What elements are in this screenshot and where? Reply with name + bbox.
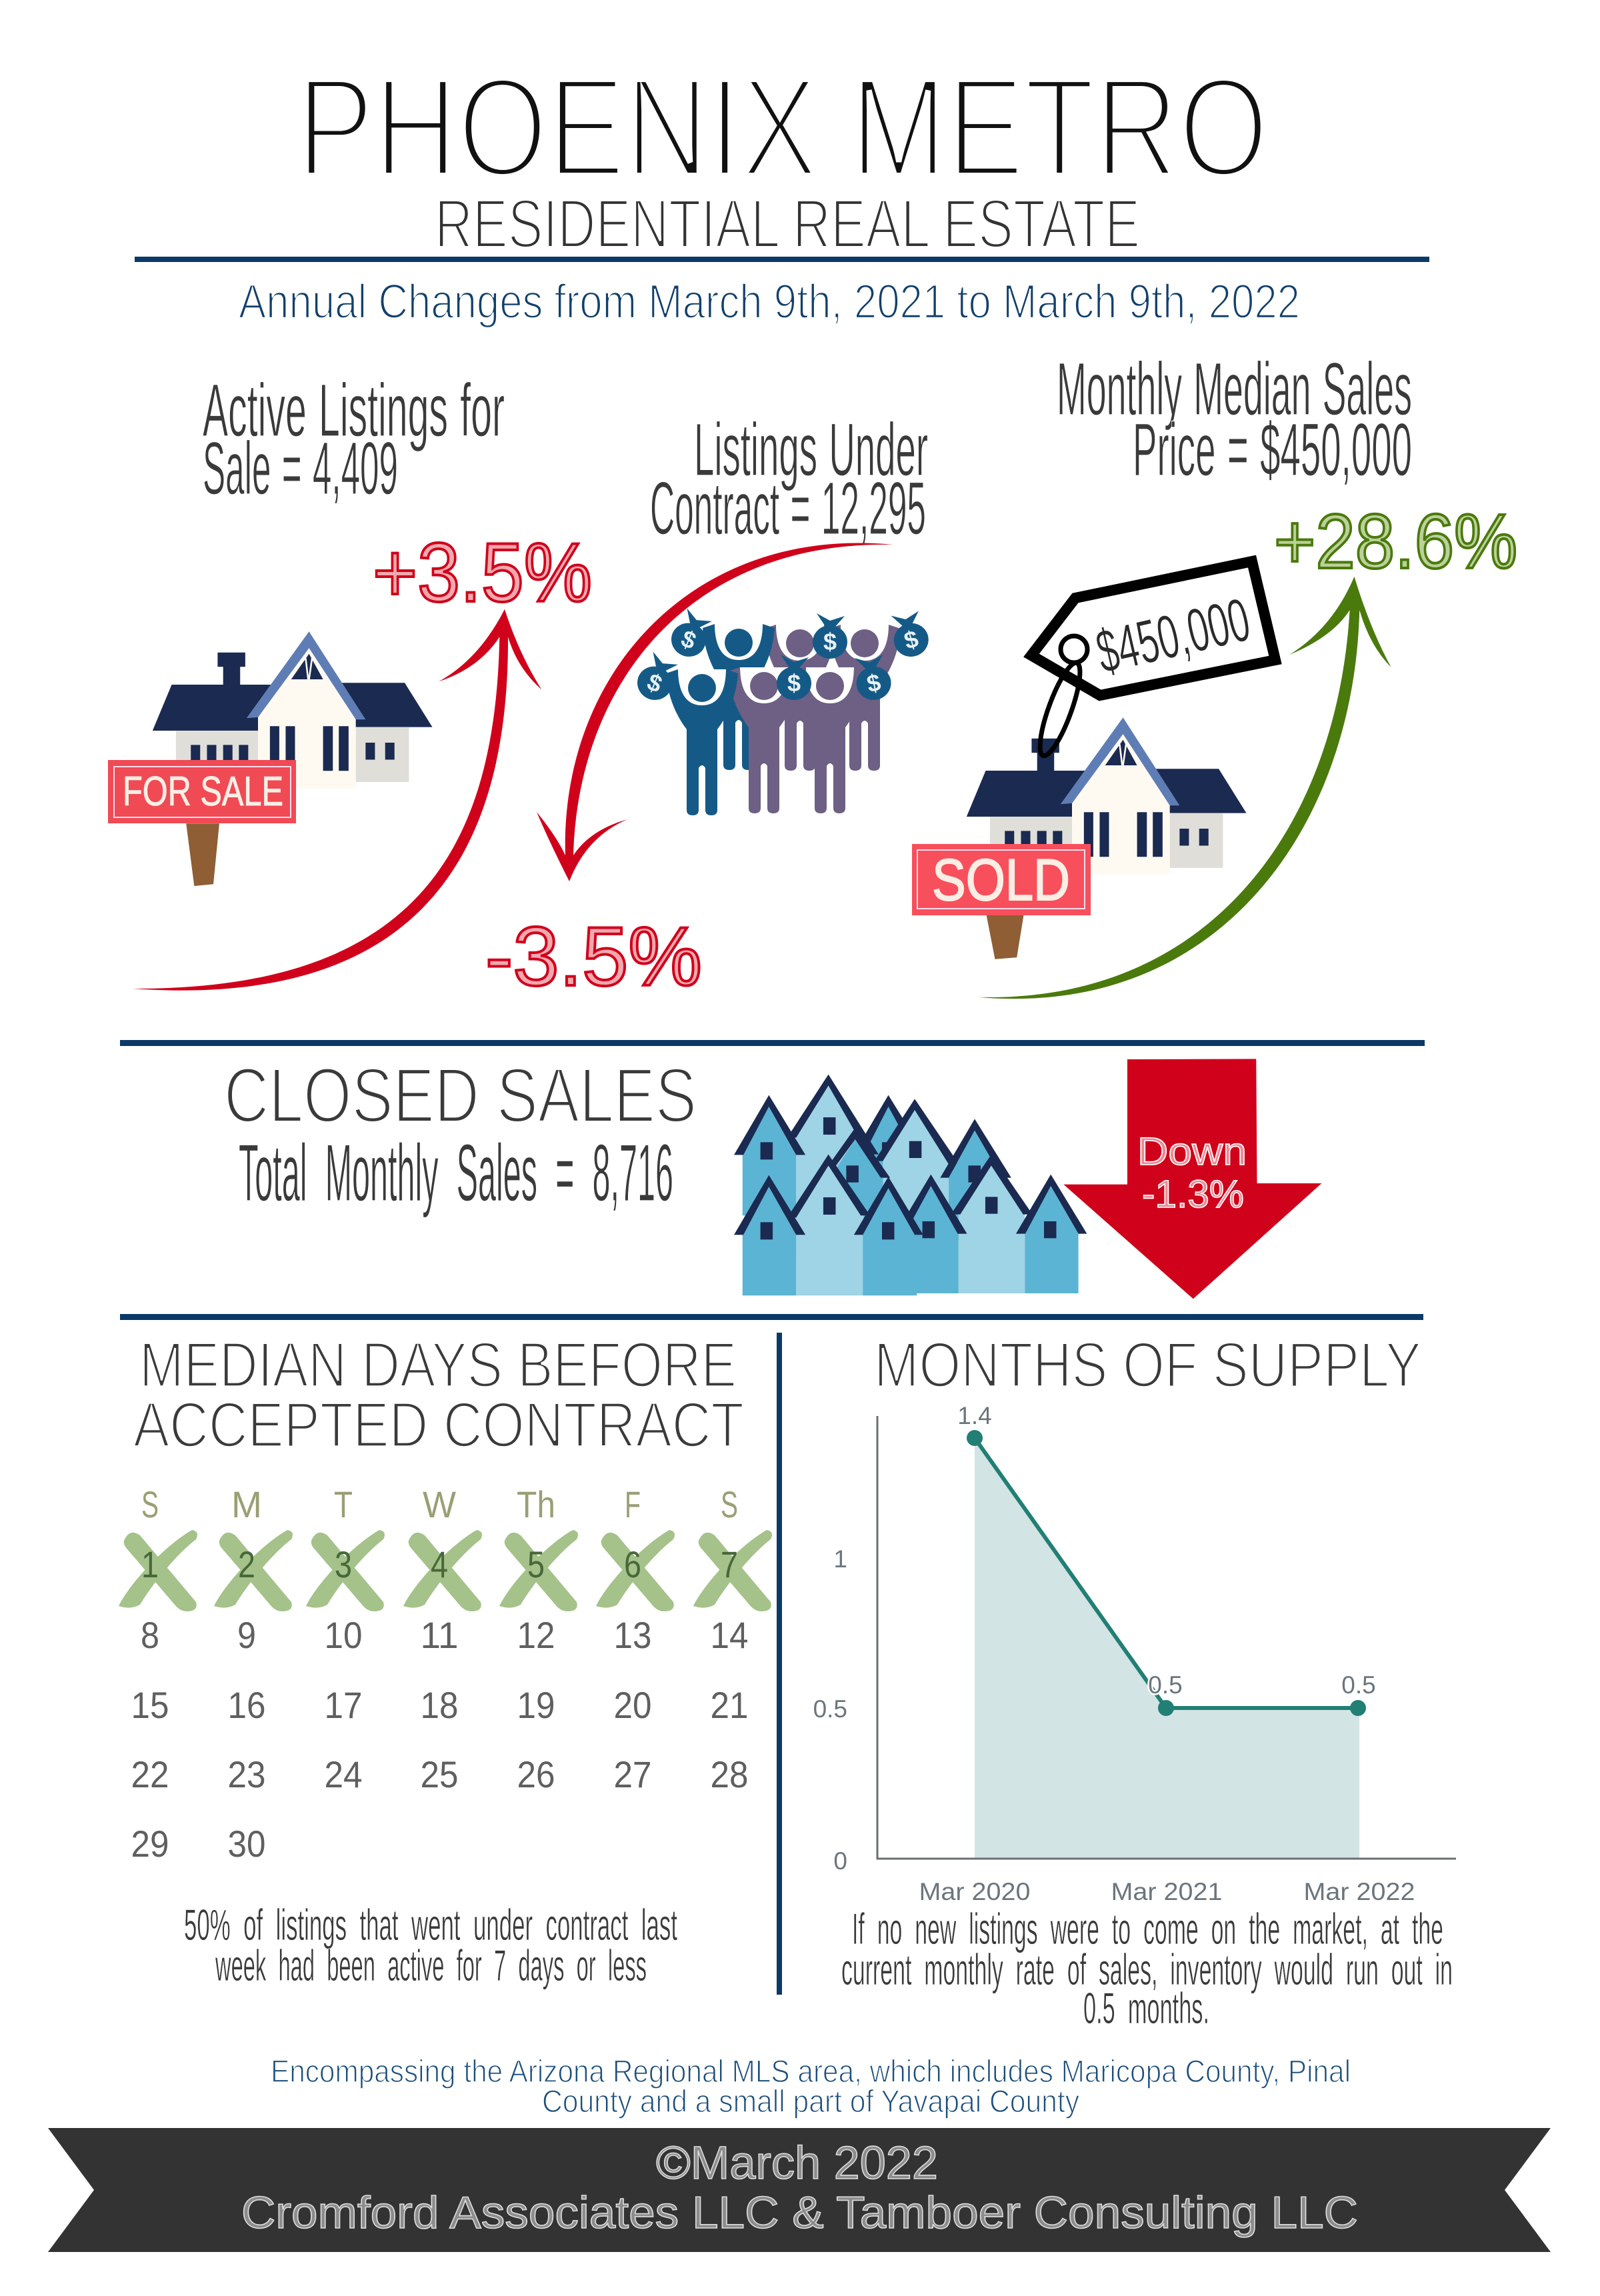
area line chart: 1 [833, 1545, 847, 1573]
calendar: 1 [141, 1543, 159, 1585]
calendar: 16 [228, 1684, 265, 1726]
calendar: 29 [131, 1823, 169, 1865]
icon: crowd with money bags: $ [787, 669, 801, 697]
panel: months of supply [813, 1329, 1456, 2033]
calendar: W [423, 1483, 456, 1525]
arrow: price up [979, 577, 1391, 999]
area line chart: Mar 2021 [1111, 1878, 1223, 1905]
median days heading: ACCEPTED CONTRACT [133, 1389, 744, 1461]
coverage note: County and a small part of Yavapai County [542, 2083, 1079, 2119]
supply caption [841, 1904, 1453, 2033]
calendar: 22 [131, 1753, 169, 1795]
sales change label: Down [1137, 1130, 1247, 1173]
calendar: 26 [517, 1753, 555, 1795]
calendar: S [141, 1483, 159, 1525]
median price label [1057, 347, 1412, 491]
area line chart: Mar 2020 [919, 1878, 1031, 1905]
panel: active listings [108, 369, 592, 991]
median days heading: MEDIAN DAYS BEFORE [139, 1329, 737, 1401]
icon: sold sign: SOLD [932, 847, 1070, 913]
sales change label: -1.3% [1142, 1173, 1244, 1216]
icon: price tag: $450,000 [1090, 585, 1256, 687]
calendar: 11 [420, 1614, 459, 1656]
date range heading: Annual Changes from March 9th, 2021 to March 9th, 2022 [239, 275, 1300, 329]
under contract change: -3.5% [485, 911, 702, 1003]
icon: sold sign [912, 844, 1091, 959]
sales change label [1137, 1130, 1247, 1216]
calendar: 30 [228, 1823, 265, 1865]
calendar: 15 [131, 1684, 169, 1726]
calendar: 2 [238, 1543, 255, 1585]
calendar: F [625, 1483, 641, 1525]
text: Contract = 12,295 [650, 467, 926, 550]
icon: crowd with money bags [632, 607, 932, 815]
text: Listings Under [694, 408, 928, 491]
closed sales heading: CLOSED SALES [224, 1052, 697, 1139]
icon: crowd with money bags: $ [901, 625, 921, 655]
months of supply heading: MONTHS OF SUPPLY [874, 1329, 1421, 1401]
calendar crossed-out days [119, 1530, 772, 1611]
subtitle: RESIDENTIAL REAL ESTATE [435, 185, 1140, 262]
area line chart: 0.5 [813, 1695, 847, 1723]
area line chart: 1.4 [957, 1402, 992, 1429]
calendar: M [231, 1483, 262, 1525]
icon: crowd with money bags: $ [864, 668, 883, 698]
active listings label [203, 369, 505, 510]
calendar: 27 [613, 1753, 652, 1795]
icon: crowd with money bags: $ [643, 668, 666, 698]
calendar: 14 [711, 1614, 748, 1656]
panel: median days before accepted contract [119, 1329, 772, 1990]
icon: crowd with money bags: $ [823, 628, 837, 655]
calendar: 24 [324, 1753, 363, 1795]
calendar caption: 50% of listings that went under contract last [184, 1900, 677, 1949]
calendar caption: week had been active for 7 days or less [215, 1941, 647, 1990]
calendar: 28 [711, 1753, 748, 1795]
median days heading [133, 1329, 744, 1461]
calendar: 4 [431, 1543, 448, 1585]
calendar caption [184, 1900, 677, 1990]
panel: listings under contract [485, 408, 932, 1003]
copyright text [241, 2137, 1358, 2238]
coverage note: Encompassing the Arizona Regional MLS area, which includes Maricopa County, Pinal [271, 2053, 1351, 2089]
panel: median sales price [912, 347, 1517, 999]
calendar: 17 [324, 1684, 363, 1726]
icon: row of houses [734, 1075, 1087, 1295]
calendar: 5 [527, 1543, 545, 1585]
area line chart: Mar 2022 [1304, 1878, 1415, 1905]
footer ribbon [48, 2128, 1551, 2252]
panel: closed sales [224, 1052, 1321, 1299]
calendar: 6 [624, 1543, 641, 1585]
icon: sold house [967, 717, 1247, 875]
calendar: 21 [711, 1684, 748, 1726]
arrow: under contract down [537, 543, 893, 881]
arrow: sales down [1063, 1059, 1321, 1299]
active listings label: Active Listings for [203, 369, 505, 452]
icon: price tag [1031, 561, 1275, 759]
calendar: 23 [228, 1753, 265, 1795]
calendar: 8 [141, 1614, 159, 1656]
under contract label [650, 408, 928, 550]
panel: closed sales: Total Monthly Sales = 8,716 [239, 1127, 673, 1218]
icon: house for sale [153, 631, 433, 789]
coverage note [271, 2053, 1351, 2119]
calendar: 7 [721, 1543, 738, 1585]
supply caption: 0.5 months. [1083, 1983, 1209, 2033]
calendar: 9 [237, 1614, 256, 1656]
active listings label: Sale = 4,409 [203, 427, 398, 510]
title: PHOENIX METRO [297, 48, 1269, 206]
area line chart: 0.5 [1341, 1671, 1376, 1699]
calendar: 3 [335, 1543, 352, 1585]
icon: crowd with money bags: $ [677, 625, 700, 655]
calendar: Th [517, 1483, 555, 1525]
calendar: 13 [613, 1614, 652, 1656]
calendar: 20 [613, 1684, 652, 1726]
calendar: 25 [420, 1753, 459, 1795]
icon: for sale sign: FOR SALE [123, 769, 283, 815]
area line chart: 0 [833, 1847, 847, 1875]
copyright text: ©March 2022 [656, 2137, 938, 2189]
calendar: S [721, 1483, 738, 1525]
calendar: 19 [517, 1684, 555, 1726]
active listings change: +3.5% [373, 527, 592, 619]
area line chart: 0.5 [1148, 1671, 1183, 1699]
arrow: active listings up [133, 609, 541, 991]
median price change: +28.6% [1274, 498, 1517, 585]
calendar [131, 1483, 748, 1865]
calendar: T [334, 1483, 353, 1525]
icon: for sale sign [108, 760, 296, 886]
copyright text: Cromford Associates LLC & Tamboer Consulting LLC [241, 2187, 1358, 2238]
area line chart [813, 1402, 1456, 1905]
calendar: 12 [517, 1614, 555, 1656]
calendar: 10 [324, 1614, 363, 1656]
calendar: 18 [420, 1684, 459, 1726]
